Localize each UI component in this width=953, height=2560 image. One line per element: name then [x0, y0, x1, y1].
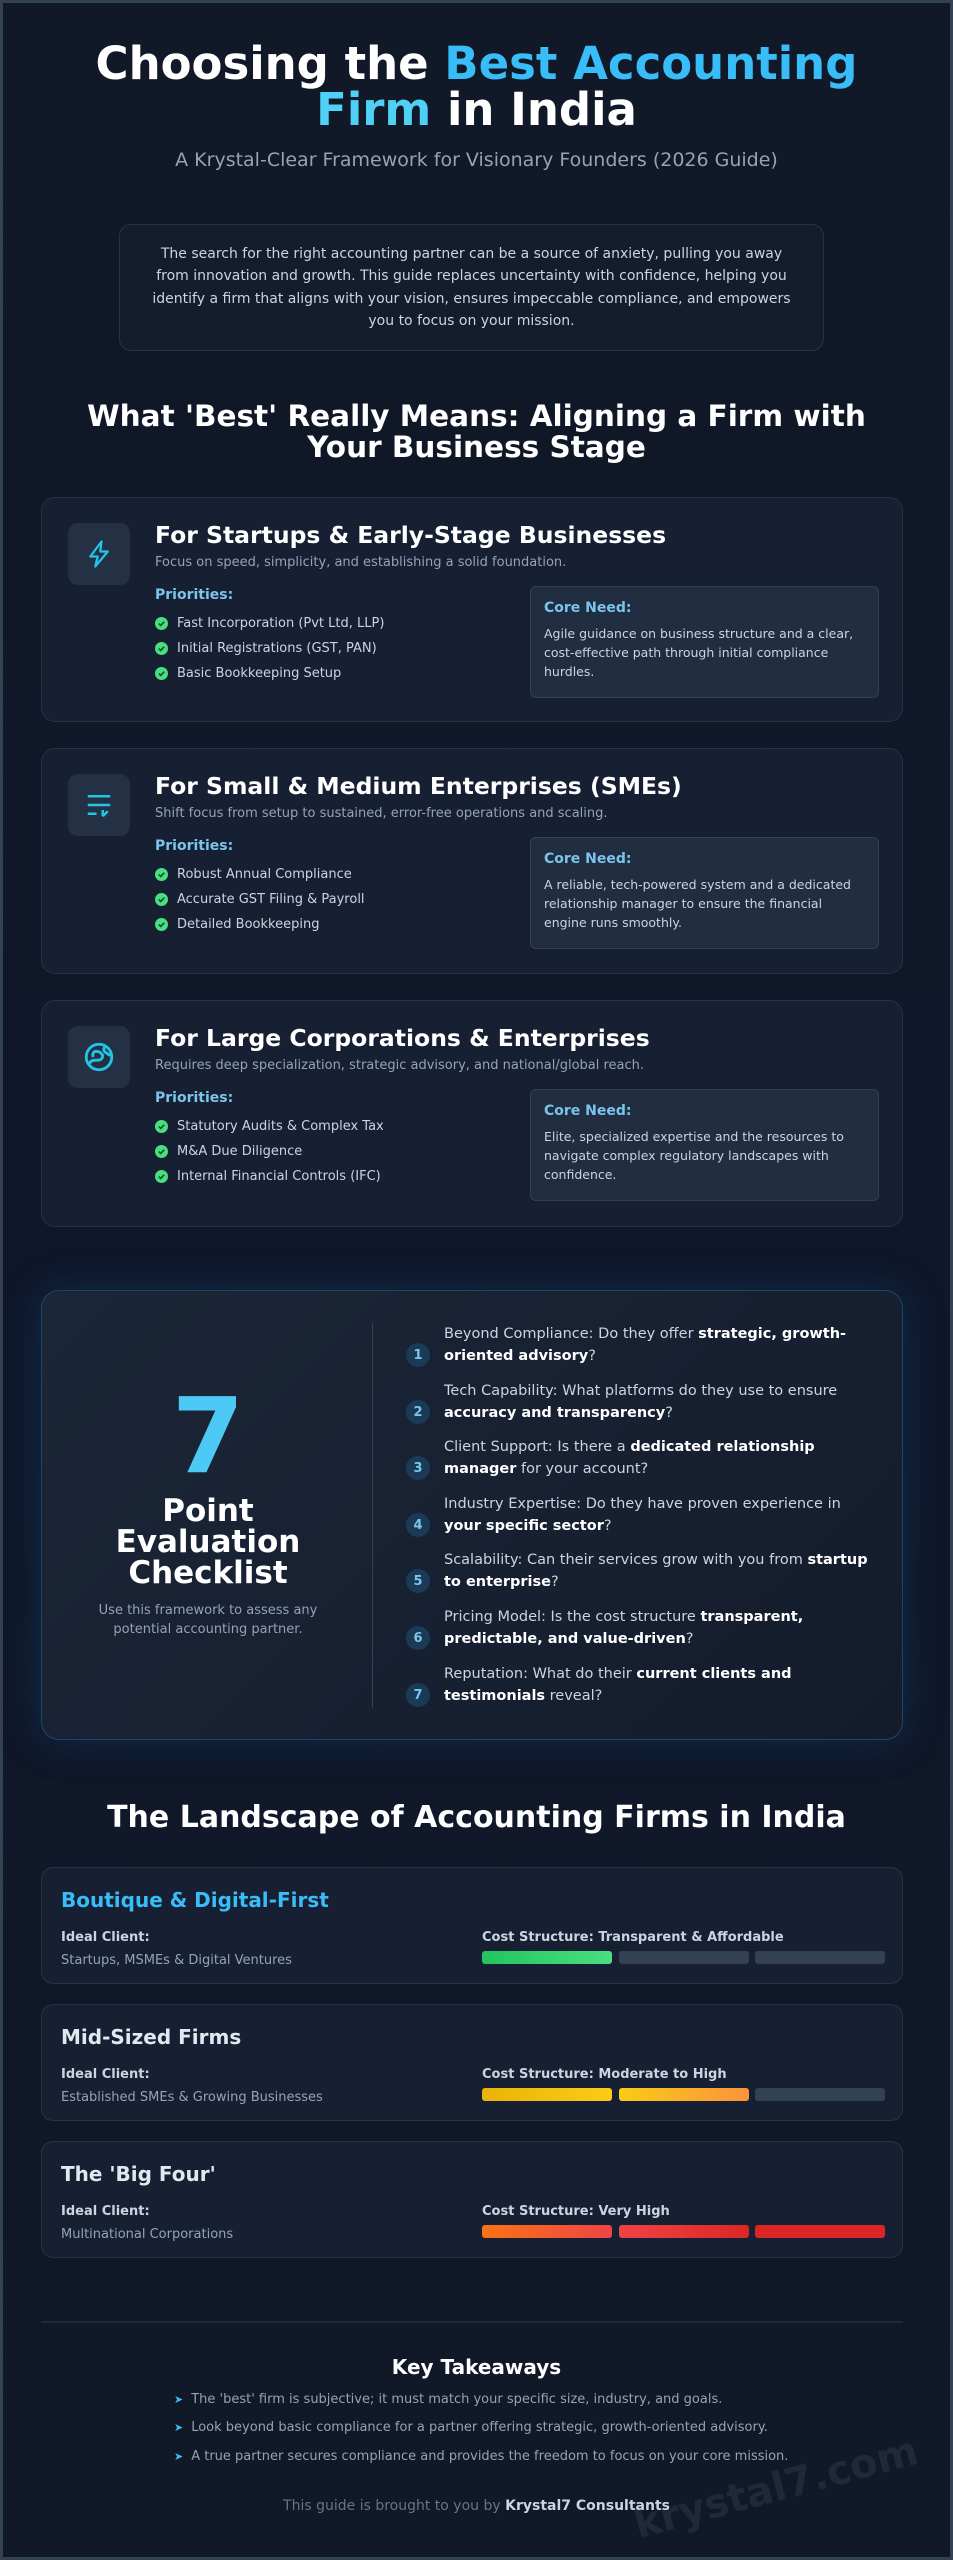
takeaways list: ➤ Look beyond basic compliance for a partner offering strategic, growth-oriented advisory. [174, 2420, 768, 2435]
checklist items: Scalability: Can their services grow with you from startup to enterprise? [444, 1552, 868, 1590]
checklist items: 6 [413, 1630, 423, 1646]
takeaways list: ➤ The 'best' firm is subjective; it must match your specific size, industry, and goals. [174, 2392, 722, 2407]
checklist items: 2 [413, 1404, 423, 1420]
panel: startups: Priorities: [155, 587, 233, 603]
icon: globe [68, 1026, 130, 1088]
firm card: mid-sized: Cost Structure: Moderate to High [482, 2067, 727, 2082]
checklist heading: Point [162, 1493, 254, 1529]
checklist items: Reputation: What do their current clients and testimonials reveal? [444, 1666, 792, 1704]
panel: SMEs: Robust Annual Compliance [177, 867, 352, 882]
footer: This guide is brought to you by Krystal7 Consultants [283, 2498, 670, 2514]
firm card: mid-sized: Established SMEs & Growing Businesses [61, 2090, 323, 2105]
cost bar [482, 1951, 885, 1964]
icon: lightning [68, 523, 130, 585]
checklist heading: Checklist [128, 1555, 288, 1591]
checklist items: 4 [413, 1518, 423, 1532]
checklist items: 7 [413, 1688, 423, 1702]
firm card: big four: Ideal Client: [61, 2204, 150, 2219]
checklist items: Beyond Compliance: Do they offer strategic, growth-oriented advisory? [444, 1326, 846, 1364]
section heading: business stage: Your Business Stage [307, 430, 646, 464]
panel: SMEs [41, 748, 903, 974]
panel: SMEs: Accurate GST Filing & Payroll [177, 892, 365, 907]
key takeaways heading: Key Takeaways [392, 2355, 561, 2379]
firm card: big four [41, 2141, 903, 2258]
firm card: big four: The 'Big Four' [61, 2162, 216, 2186]
panel: 7 point checklist [41, 1290, 903, 1740]
checklist note: Use this framework to assess any potential accounting partner. [99, 1603, 317, 1637]
icon: list [68, 774, 130, 836]
panel: large corporations [41, 1000, 903, 1227]
core need: Core Need: [544, 1103, 632, 1119]
panel: startups: Initial Registrations (GST, PAN) [177, 641, 377, 656]
checklist items: Client Support: Is there a dedicated relationship manager for your account? [444, 1439, 815, 1477]
panel: large corporations: Statutory Audits & Complex Tax [177, 1119, 384, 1134]
panel: startups: Basic Bookkeeping Setup [177, 666, 341, 681]
intro box [119, 224, 824, 351]
panel: startups: Focus on speed, simplicity, and establishing a solid foundation. [155, 555, 566, 570]
firm card: boutique [41, 1867, 903, 1984]
core need: Agile guidance on business structure and a clear, cost-effective path through initial compliance hurdles. [544, 626, 853, 679]
checklist heading: Evaluation [116, 1524, 300, 1560]
section heading: business stage: What 'Best' Really Means: Aligning a Firm with [87, 399, 866, 433]
panel: large corporations: Priorities: [155, 1090, 233, 1106]
checklist items: 3 [413, 1460, 423, 1476]
checklist heading [116, 1493, 300, 1591]
core need: Core Need: [544, 600, 632, 616]
core need [530, 837, 879, 949]
panel: SMEs: For Small & Medium Enterprises (SMEs) [155, 772, 682, 800]
checklist items: Pricing Model: Is the cost structure transparent, predictable, and value-driven? [444, 1609, 803, 1647]
big seven: 7 [172, 1375, 244, 1497]
core need [530, 586, 879, 698]
watermark: krystal7.com [629, 2428, 923, 2548]
section heading: landscape: The Landscape of Accounting Firms in India [107, 1800, 846, 1835]
panel: large corporations: Requires deep specialization, strategic advisory, and national/global reach. [155, 1058, 644, 1073]
firm card: big four: Multinational Corporations [61, 2227, 233, 2242]
title [96, 37, 857, 136]
firm card: mid-sized [41, 2004, 903, 2121]
panel: large corporations: For Large Corporations & Enterprises [155, 1024, 650, 1052]
panel: large corporations: Internal Financial Controls (IFC) [177, 1169, 381, 1184]
checklist items: Tech Capability: What platforms do they use to ensure accuracy and transparency? [444, 1383, 837, 1421]
checklist items: Industry Expertise: Do they have proven experience in your specific sector? [444, 1496, 841, 1534]
firm card: boutique: Boutique & Digital-First [61, 1888, 329, 1912]
core need: Elite, specialized expertise and the resources to navigate complex regulatory landscapes with confidence. [544, 1129, 844, 1182]
title: Choosing the Best Accounting [96, 37, 857, 90]
takeaways list: ➤ A true partner secures compliance and provides the freedom to focus on your core mission. [174, 2449, 788, 2464]
takeaways list [174, 2392, 788, 2464]
cost bar [482, 2088, 885, 2101]
firm card: mid-sized: Ideal Client: [61, 2067, 150, 2082]
checklist items: 5 [413, 1574, 423, 1588]
core need: Core Need: [544, 851, 632, 867]
panel: startups: For Startups & Early-Stage Businesses [155, 521, 666, 549]
checklist items [406, 1326, 868, 1707]
title: Firm in India [316, 83, 637, 136]
panel: startups [41, 497, 903, 722]
firm card: boutique: Ideal Client: [61, 1930, 150, 1945]
panel: SMEs: Detailed Bookkeeping [177, 917, 319, 932]
firm card: big four: Cost Structure: Very High [482, 2204, 670, 2219]
panel: SMEs: Shift focus from setup to sustained, error-free operations and scaling. [155, 806, 608, 821]
firm card: mid-sized: Mid-Sized Firms [61, 2025, 241, 2049]
subtitle: A Krystal-Clear Framework for Visionary Founders (2026 Guide) [175, 149, 778, 171]
cost bar [482, 2225, 885, 2238]
panel: SMEs: Priorities: [155, 838, 233, 854]
checklist items: 1 [413, 1348, 423, 1362]
section heading: business stage [87, 399, 866, 464]
intro box: The search for the right accounting partner can be a source of anxiety, pulling you away from innovation and growth. This guide replaces uncertainty with confidence, helping you identify a firm that aligns with your vision, ensures impeccable compliance, and empowers you to focus on your mission. [152, 246, 791, 329]
core need: A reliable, tech-powered system and a dedicated relationship manager to ensure the financial engine runs smoothly. [544, 877, 851, 930]
core need [530, 1089, 879, 1201]
firm card: boutique: Cost Structure: Transparent & Affordable [482, 1930, 784, 1945]
firm card: boutique: Startups, MSMEs & Digital Ventures [61, 1953, 292, 1968]
panel: large corporations: M&A Due Diligence [177, 1144, 302, 1159]
panel: startups: Fast Incorporation (Pvt Ltd, LLP) [177, 616, 384, 631]
